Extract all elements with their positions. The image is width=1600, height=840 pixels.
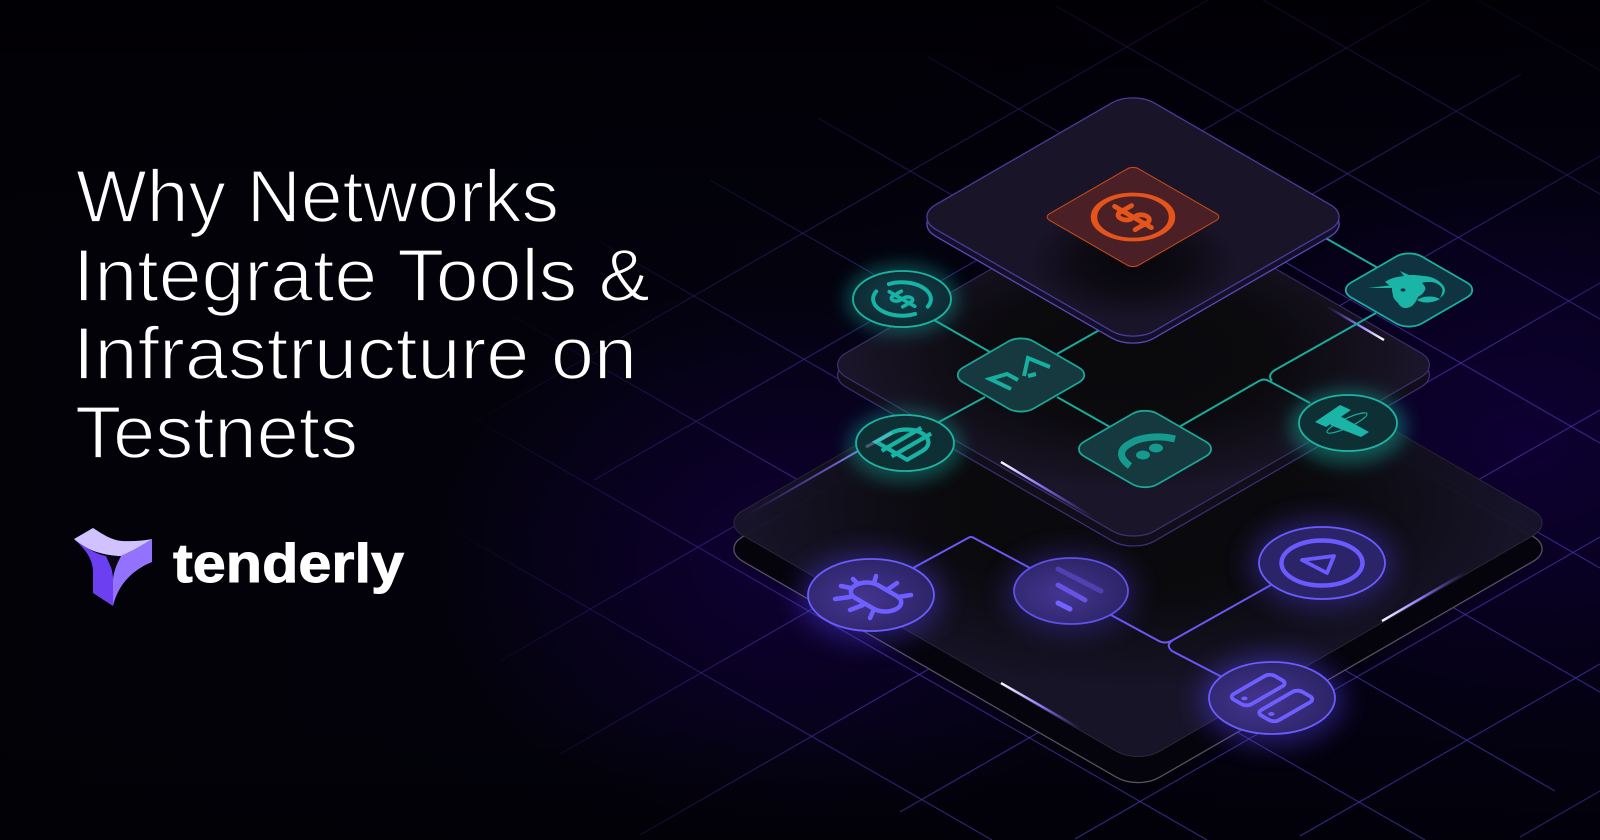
node: play (1250, 518, 1394, 608)
node: Maker (950, 334, 1092, 416)
node: Tether (1290, 390, 1406, 464)
title: Why Networks (76, 155, 559, 238)
node: bars (1005, 551, 1137, 635)
node: Uniswap (1338, 249, 1480, 331)
middle layer plate (837, 268, 1430, 547)
top layer plate (915, 91, 1351, 350)
title (73, 155, 650, 474)
bottom layer plate (733, 431, 1543, 784)
node: Centrifuge (1071, 406, 1219, 492)
node: DAI (848, 410, 962, 482)
logo mark (74, 528, 152, 606)
title: Infrastructure on (73, 312, 637, 395)
orange dollar tile (1044, 166, 1222, 268)
node: USDC (846, 264, 958, 334)
icon: dollar coin (1078, 185, 1188, 249)
title: Integrate Tools & (73, 234, 650, 317)
purple connectors (913, 537, 1271, 677)
title: Testnets (75, 391, 358, 474)
node: bug (799, 552, 943, 642)
wordmark: tenderly (173, 532, 404, 594)
teal connectors (934, 236, 1378, 427)
tenderly logo (74, 528, 404, 606)
node: servers (1200, 655, 1344, 745)
